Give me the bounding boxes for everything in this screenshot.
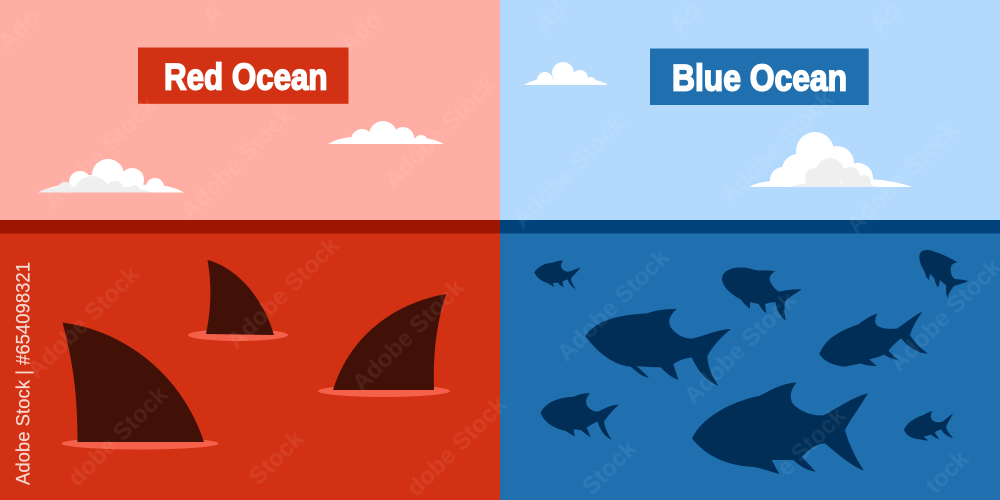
- watermark pattern: Adobe Stock: [552, 243, 675, 367]
- watermark pattern: Adobe Stock: [22, 260, 145, 384]
- red horizon band: [0, 220, 500, 234]
- watermark pattern: Adobe Stock: [39, 91, 162, 215]
- fish: small lower right: [904, 411, 953, 441]
- watermark pattern: Stock: [244, 425, 310, 490]
- cloud: upper left: [524, 62, 607, 85]
- panel: blue ocean: [500, 0, 1000, 500]
- watermark pattern: Adobe Stock: [176, 101, 299, 225]
- cloud: upper right: [328, 121, 443, 144]
- shark fin: large left: [62, 322, 218, 450]
- heading: Blue Ocean: [650, 48, 869, 105]
- shark fin: right: [318, 294, 450, 397]
- watermark pattern: tock: [920, 445, 975, 499]
- watermark pattern: Ado: [335, 6, 387, 58]
- heading: Red Ocean: [138, 48, 348, 104]
- fish: small top left: [534, 260, 581, 289]
- school of fish: [534, 250, 968, 474]
- watermark pattern: Adobe Stock: [716, 85, 839, 209]
- blue horizon band: [500, 220, 1000, 234]
- watermark pattern: Adobe Stock: [841, 115, 964, 239]
- fish: largest: [692, 382, 868, 474]
- panel: red ocean: [0, 0, 500, 500]
- watermark pattern: Stock: [577, 435, 643, 500]
- watermark pattern: dobe Stock: [63, 381, 174, 492]
- red sea: [0, 234, 500, 500]
- heading: Red Ocean: Red Ocean: [164, 56, 328, 97]
- watermark pattern: Adobe Stock: [508, 110, 631, 234]
- watermark pattern: Adobe Stock: [222, 231, 345, 355]
- blue sea: [500, 234, 1000, 500]
- fish: lower left: [541, 393, 619, 440]
- fish: right middle: [819, 312, 928, 367]
- cloud: lower right: [749, 132, 911, 193]
- watermark pattern: dobe Stock: [402, 391, 513, 500]
- watermark pattern: Adobe Stock: [347, 273, 470, 397]
- fish: large upper left: [585, 309, 731, 386]
- cloud: lower left: [38, 159, 184, 192]
- blue sky: [500, 0, 1000, 220]
- watermark pattern: Adobe Stock: [679, 286, 802, 410]
- watermark pattern: Adobe Stock: [379, 70, 502, 194]
- shark fin: small centre: [188, 260, 288, 341]
- fish: upper middle: [722, 267, 802, 321]
- heading: Blue Ocean: Blue Ocean: [672, 58, 847, 99]
- watermark pattern: e Stock: [772, 402, 852, 482]
- fish: upper right: [919, 250, 968, 298]
- red sky: [0, 0, 500, 220]
- vertical stock id text: Adobe Stock | #654098321: [14, 262, 34, 485]
